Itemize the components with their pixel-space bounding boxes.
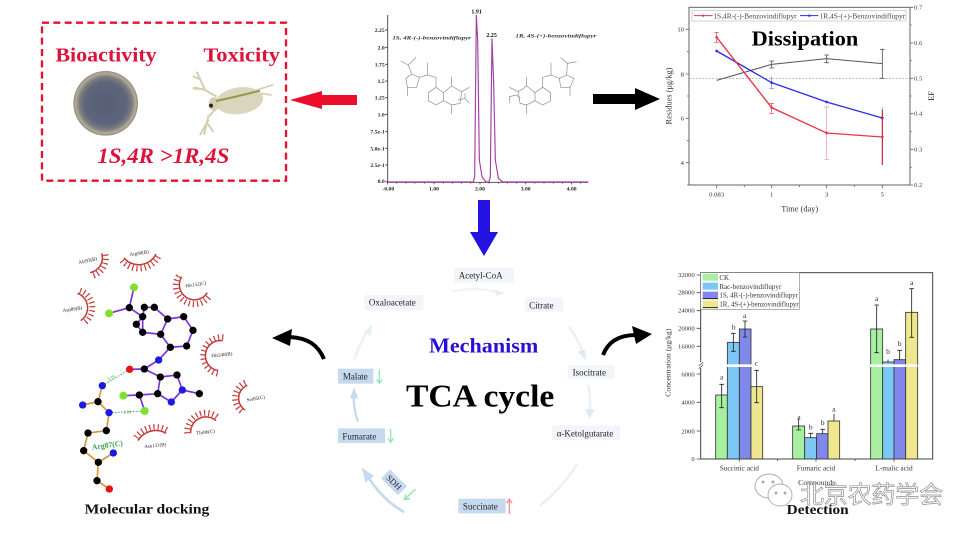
- y axis labels: 1.75: [375, 62, 385, 68]
- residue labels: Asp89(B): [63, 306, 83, 314]
- significance letters: a: [797, 412, 801, 421]
- y axis labels: 2.0: [378, 45, 385, 51]
- y axis labels: 7.5e-1: [370, 130, 385, 136]
- left axis labels: 10: [677, 27, 685, 34]
- right axis labels: 0.7: [914, 4, 923, 11]
- heading: mechanism: Mechanism: [429, 333, 539, 357]
- y axis labels: 32000: [678, 272, 695, 279]
- axis titles: Concentration (μg/kg): [664, 328, 673, 397]
- atoms fluorine: [105, 283, 149, 415]
- heading: bioactivity: Bioactivity: [55, 44, 157, 66]
- significance letters: a: [743, 311, 747, 320]
- significance letters: a: [875, 294, 879, 303]
- y axis labels: 0.0: [378, 179, 385, 185]
- heading: toxicity: Toxicity: [203, 44, 280, 66]
- x axis labels: 3: [825, 192, 829, 199]
- heading: TCA cycle: TCA cycle: [406, 378, 554, 414]
- arrow: blue down: [470, 200, 498, 256]
- node: Succinate: [458, 499, 506, 513]
- node: Acetyl-CoA: Acetyl-CoA: [459, 270, 503, 280]
- panel: bioactivity and toxicity: [42, 23, 286, 181]
- arrow: black right: [593, 88, 660, 110]
- bars: L-malic acid: [871, 312, 918, 459]
- x axis labels: 5: [881, 192, 885, 199]
- residue labels: Ala93(B): [78, 257, 98, 266]
- residue labels: [63, 250, 266, 450]
- y axis labels: 1.5: [378, 79, 385, 85]
- x axis labels: Succinic acid: [720, 464, 759, 473]
- node: SDH: [381, 469, 407, 495]
- chart: chromatogram: [370, 10, 597, 193]
- enantiomer label right: 1R, 4S-(+)-benzovindiflupyr: [515, 32, 597, 39]
- icon: wechat: [755, 474, 792, 506]
- x axis labels: 2.00: [475, 187, 485, 193]
- icon: daphnia: [193, 72, 273, 135]
- arrow: curved to detection: [603, 326, 652, 355]
- y axis labels: 2000: [681, 428, 695, 435]
- node: Acetyl-CoA: [454, 268, 514, 282]
- chart: dissipation: Residues (μg/kg): [664, 67, 673, 124]
- residue labels: Ser85(C): [246, 395, 266, 404]
- y axis labels: 16000: [678, 343, 695, 350]
- node: alpha-Ketolgutarate: α-Ketolgutarate: [557, 428, 613, 438]
- legend: 1R, 4S-(+)-benzovindiflupyr: [719, 301, 799, 309]
- y axis labels: 1.0: [378, 112, 385, 118]
- node: Citrate: [525, 297, 563, 312]
- right axis labels: [914, 4, 923, 189]
- node: alpha-Ketolgutarate: [552, 426, 620, 440]
- enantiomer label left: 1S, 4R-(-)-benzovindiflupyr: [392, 34, 472, 41]
- residue labels: Thr86(C): [196, 430, 216, 437]
- significance letters: b: [732, 323, 736, 332]
- y axis labels: 5.0e-1: [370, 146, 385, 152]
- bond distance labels: [107, 374, 131, 415]
- x axis labels: 1: [770, 192, 773, 199]
- watermark: [755, 474, 943, 510]
- legend: Rac-benzovindiflupyr: [719, 283, 782, 291]
- significance letters: [720, 278, 914, 431]
- atoms carbon: [80, 304, 203, 484]
- y axis labels: 4000: [681, 400, 695, 407]
- bond distance labels: 3.19: [107, 374, 116, 382]
- residue bonds: [83, 386, 113, 489]
- heading: molecular docking: Molecular docking: [85, 501, 210, 516]
- x axis labels: [382, 187, 577, 193]
- left axis labels: 4: [681, 160, 685, 167]
- heading: detection: Detection: [787, 502, 849, 517]
- node: Oxaloacetate: [364, 295, 423, 310]
- x axis labels: -0.00: [382, 187, 394, 193]
- x axis labels: 1.00: [429, 187, 439, 193]
- structure right: [509, 57, 577, 114]
- right axis labels: 0.3: [914, 146, 923, 153]
- indicator arrows: [377, 370, 512, 514]
- watermark text: 北京农药学会: [800, 475, 943, 510]
- legend: 1S,4R-(-)-Benzovindiflupyr: [713, 13, 797, 21]
- significance letters: b: [886, 347, 890, 356]
- significance letters: b: [809, 422, 813, 431]
- left axis labels: 8: [681, 71, 685, 78]
- y axis labels: 6000: [681, 371, 695, 378]
- node: Isocitrate: [568, 365, 614, 379]
- node: Fumarate: Fumarate: [342, 431, 376, 441]
- y axis labels: 24000: [678, 308, 695, 315]
- residue labels: Arg90(B): [129, 250, 149, 258]
- node: Oxaloacetate: Oxaloacetate: [369, 298, 416, 308]
- heading: dissipation: Dissipation: [752, 27, 858, 51]
- atoms oxygen: [106, 366, 133, 493]
- ligand bonds: [109, 287, 199, 411]
- cycle arrows: [350, 289, 595, 512]
- x axis labels: 4.00: [567, 187, 577, 193]
- y axis labels: 20000: [678, 326, 695, 333]
- chart: dissipation: [664, 4, 936, 213]
- atoms nitrogen: [79, 356, 186, 457]
- legend: [692, 10, 906, 21]
- y axis labels: 0: [691, 456, 695, 463]
- left axis labels: [677, 27, 685, 167]
- icon: petri dish: [73, 71, 138, 136]
- arrow: red left: [290, 91, 357, 109]
- residue labels: His152(C): [185, 282, 207, 289]
- node: Malate: [338, 369, 373, 384]
- y axis labels: 2.5e-1: [370, 163, 385, 169]
- significance letters: a: [910, 278, 914, 287]
- arrow: curved to docking: [272, 329, 324, 359]
- structure left: [401, 57, 469, 114]
- right axis labels: 0.5: [914, 75, 923, 82]
- bars: succinic acid: [716, 329, 763, 459]
- legend: 1S, 4R-(-)-benzovindiflupyr: [719, 292, 799, 300]
- y axis labels: 28000: [678, 290, 695, 297]
- node: Fumarate: [338, 428, 385, 443]
- y axis labels: [370, 28, 385, 185]
- axis titles: Time (day): [781, 204, 818, 213]
- panel: TCA cycle: [338, 268, 620, 514]
- residue labels: His248(B): [211, 352, 233, 359]
- legend: [701, 273, 799, 309]
- right axis labels: 0.6: [914, 40, 923, 47]
- node: Isocitrate: Isocitrate: [573, 368, 606, 378]
- right axis labels: 0.4: [914, 111, 923, 118]
- peak labels: 1.91: [471, 10, 482, 16]
- hydrogen bonds: [102, 369, 145, 413]
- node: SDH: SDH: [384, 473, 404, 492]
- chart: chromatogram: 2.25: [486, 33, 497, 39]
- y axis labels: 2.25: [375, 28, 385, 34]
- legend: 1R,4S-(+)-Benzovindiflupyr: [819, 13, 906, 21]
- y axis labels: [678, 272, 695, 463]
- node: Citrate: Citrate: [529, 300, 554, 310]
- significance letters: b: [821, 418, 825, 427]
- chart: detection bars: [664, 272, 933, 517]
- bond distance labels: 2.89: [123, 410, 131, 415]
- x axis labels: [709, 192, 885, 199]
- x axis labels: 0.083: [709, 192, 725, 199]
- bars: fumaric acid: [793, 421, 840, 459]
- chart: detection bars: Compounds: [798, 478, 835, 487]
- residue contacts: [77, 253, 247, 441]
- x axis labels: L-malic acid: [875, 464, 913, 473]
- node: Malate: Malate: [343, 372, 368, 382]
- significance letters: a: [832, 405, 836, 414]
- chart: dissipation: EF: [927, 91, 936, 101]
- node: Succinate: Succinate: [463, 502, 498, 512]
- residue labels: Asn131(B): [144, 443, 167, 450]
- axis break: [702, 364, 918, 367]
- series: 1R,4S: [717, 51, 882, 130]
- text: enantiomer ranking: 1S,4R >1R,4S: [97, 143, 229, 168]
- x axis labels: Fumaric acid: [797, 464, 836, 473]
- error bars: [719, 289, 914, 438]
- significance letters: c: [755, 359, 759, 368]
- peaks: [388, 15, 588, 182]
- x axis labels: 3.00: [521, 187, 531, 193]
- residue name: Arg87(C): [91, 439, 124, 452]
- significance letters: a: [720, 372, 724, 381]
- significance letters: b: [898, 339, 902, 348]
- y axis labels: 1.25: [375, 96, 385, 102]
- panel: molecular docking: [63, 250, 266, 516]
- right axis labels: 0.2: [914, 182, 922, 189]
- series: EF: [717, 49, 885, 80]
- x axis labels: [720, 464, 913, 473]
- legend: CK: [719, 274, 729, 282]
- left axis labels: 6: [681, 116, 685, 123]
- series: 1S,4R: [714, 32, 882, 165]
